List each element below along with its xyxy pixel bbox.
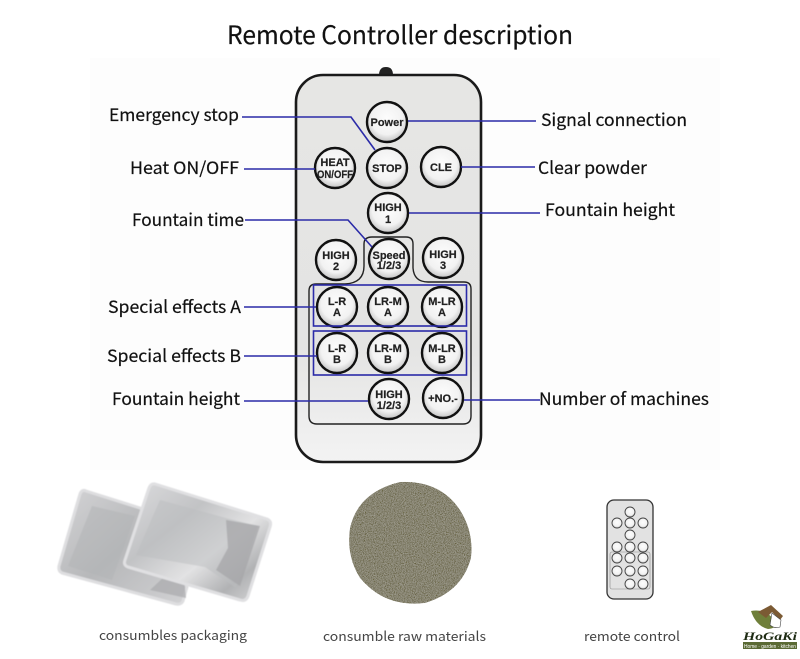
caption: remote control: remote control bbox=[584, 626, 680, 645]
title: Remote Controller description bbox=[227, 16, 573, 52]
button: L-R A bbox=[317, 287, 357, 327]
button: CLE bbox=[421, 147, 461, 187]
callout: Fountain time bbox=[132, 206, 372, 247]
callout: Clear powder: Clear powder bbox=[538, 154, 647, 179]
button: HIGH 2: HIGH bbox=[322, 250, 350, 262]
button: HIGH 3: HIGH bbox=[429, 249, 457, 261]
callout: Number of machines: Number of machines bbox=[539, 385, 709, 410]
button: HIGH 1: 1 bbox=[385, 214, 391, 226]
antenna nub bbox=[379, 67, 393, 75]
button: L-R B: L-R bbox=[328, 343, 346, 355]
button: M-LR B: B bbox=[438, 354, 446, 366]
button: LR-M B: B bbox=[384, 354, 392, 366]
button: HIGH 2: 2 bbox=[333, 261, 339, 273]
button: NO: +NO.- bbox=[428, 393, 458, 405]
callout: Fountain time: Fountain time bbox=[132, 206, 244, 231]
button: HEAT: ON/OFF bbox=[317, 169, 353, 181]
consumables pouches bbox=[59, 484, 271, 604]
button: HIGH 2 bbox=[316, 240, 356, 280]
logo: HoGaKi: Home · garden · kitchen bbox=[744, 644, 796, 650]
button: HIGH 1 bbox=[368, 193, 408, 233]
button: HIGH 1/2/3: HIGH bbox=[375, 389, 403, 401]
button: Power bbox=[367, 102, 407, 142]
button: LR-M A: LR-M bbox=[374, 296, 402, 308]
callout: Emergency stop bbox=[109, 101, 375, 150]
consumable raw materials bbox=[349, 482, 472, 604]
button: M-LR A bbox=[422, 287, 462, 327]
button: Power: Power bbox=[370, 117, 404, 129]
callout: Signal connection: Signal connection bbox=[541, 106, 687, 131]
back pouch bbox=[59, 490, 187, 604]
callout: Special effects A: Special effects A bbox=[108, 293, 242, 318]
button: M-LR A: M-LR bbox=[428, 296, 456, 308]
highlight: special effects B box bbox=[314, 331, 466, 375]
front pouch bbox=[124, 484, 271, 600]
callout: Fountain height left: Fountain height bbox=[112, 385, 241, 410]
button: HEAT bbox=[315, 148, 355, 188]
button: HIGH 3 bbox=[423, 238, 463, 278]
caption: consumble raw materials: consumble raw materials bbox=[323, 626, 486, 645]
button: STOP bbox=[367, 148, 407, 188]
button: HEAT: HEAT bbox=[320, 157, 350, 169]
button: Speed: 1/2/3 bbox=[377, 260, 401, 272]
button: LR-M B bbox=[368, 333, 408, 373]
button: STOP: STOP bbox=[372, 163, 402, 175]
small remote control bbox=[607, 500, 653, 599]
button: Speed bbox=[369, 239, 409, 279]
button: L-R A: L-R bbox=[328, 296, 346, 308]
button: Speed: Speed bbox=[372, 250, 406, 262]
logo: HoGaKi: HoGaKi bbox=[742, 631, 798, 643]
button: LR-M A: A bbox=[384, 307, 392, 319]
callout: Heat ON/OFF: Heat ON/OFF bbox=[130, 154, 239, 179]
highlight: special effects A box bbox=[314, 285, 466, 326]
button: L-R B: B bbox=[333, 354, 341, 366]
button: HIGH 3: 3 bbox=[440, 260, 446, 272]
button: L-R B bbox=[317, 333, 357, 373]
button: NO bbox=[423, 378, 463, 418]
button: M-LR B bbox=[422, 333, 462, 373]
remote body bbox=[296, 75, 481, 462]
button frame bbox=[309, 237, 471, 424]
button: M-LR B: M-LR bbox=[428, 343, 456, 355]
button: L-R A: A bbox=[333, 307, 341, 319]
button: HIGH 1/2/3: 1/2/3 bbox=[377, 400, 401, 412]
callout: Emergency stop: Emergency stop bbox=[109, 101, 239, 126]
callout: Special effects B: Special effects B bbox=[107, 342, 241, 367]
button: HIGH 1: HIGH bbox=[374, 202, 402, 214]
button: CLE: CLE bbox=[430, 162, 452, 174]
button: HIGH 1/2/3 bbox=[369, 379, 409, 419]
button: M-LR A: A bbox=[438, 307, 446, 319]
backdrop behind remote bbox=[90, 58, 720, 470]
button: LR-M A bbox=[368, 287, 408, 327]
caption: consumbles packaging: consumbles packaging bbox=[99, 625, 248, 644]
logo: HoGaKi bbox=[742, 605, 798, 650]
remote controller bbox=[296, 67, 481, 462]
button: LR-M B: LR-M bbox=[374, 343, 402, 355]
callout: Fountain height right: Fountain height bbox=[545, 196, 676, 221]
